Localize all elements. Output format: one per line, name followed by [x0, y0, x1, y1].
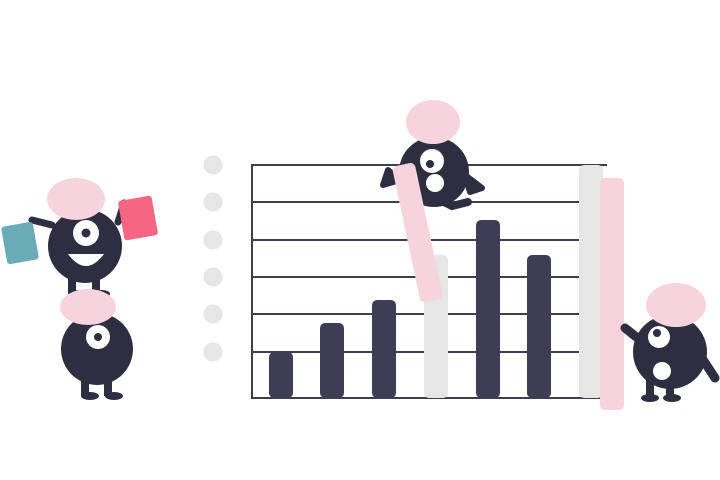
monster: right peeking: [625, 283, 715, 402]
bar chart: [269, 165, 624, 410]
monster stack: bottom: [60, 289, 133, 400]
tilted pink bar: [392, 162, 443, 303]
monster: top sitting on chart: [383, 100, 482, 207]
axis dots: [204, 156, 222, 362]
chart grid: [252, 164, 607, 399]
monster stack: top with flags: [1, 178, 158, 298]
